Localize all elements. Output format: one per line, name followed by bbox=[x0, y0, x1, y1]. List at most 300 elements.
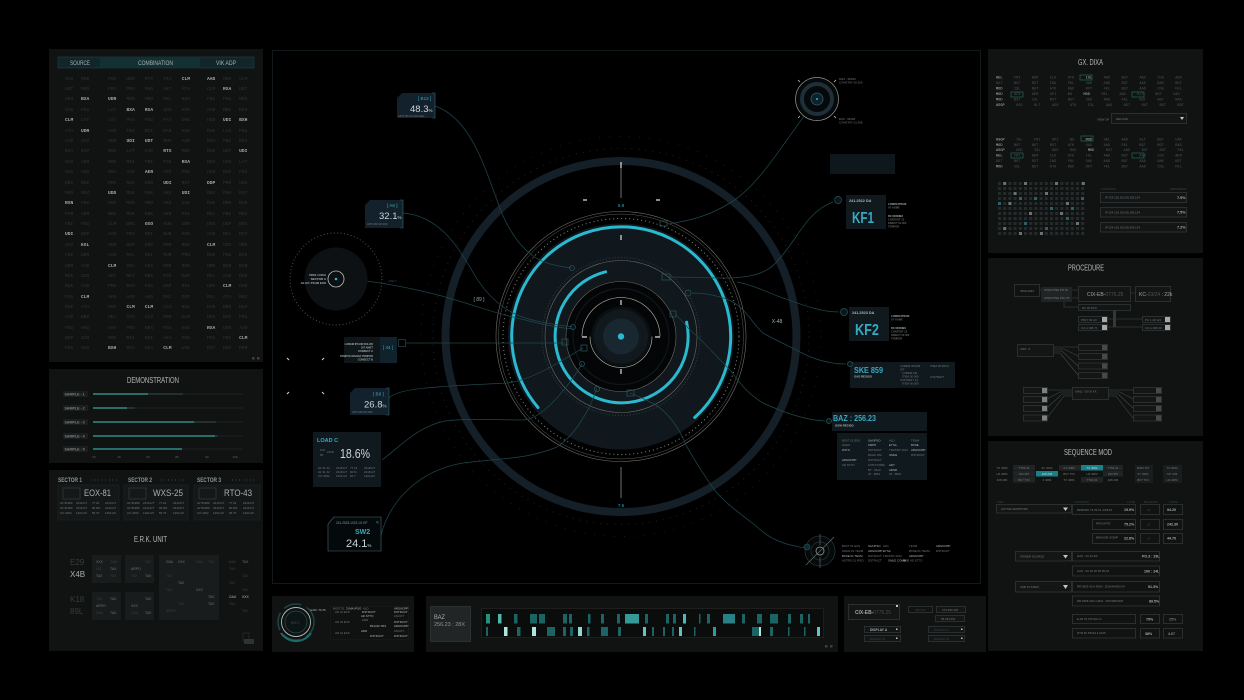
callout: KF2: 241.2523 DA bbox=[852, 311, 875, 315]
code chips: 3.X 4083 bbox=[1063, 466, 1075, 470]
baz data table: EYSA bbox=[889, 443, 897, 447]
sample bars: 40 bbox=[117, 455, 121, 459]
sequence column labels: LOAD bbox=[1127, 500, 1135, 504]
source column: FBI PSG bbox=[65, 221, 90, 227]
source column: RXN PSG bbox=[65, 200, 90, 206]
flow: top: 4650-3023 bbox=[1020, 289, 1034, 293]
combination column: PRO BXH PSG DGP RXI bbox=[108, 283, 190, 289]
lower code grid: ASGP ISL FRI UPI BG MOD HEL AAD KLT BGT UAD bbox=[996, 138, 1182, 142]
heading: procedure: PROCEDURE bbox=[1068, 264, 1104, 272]
sector 2: AV 51980 bbox=[127, 506, 140, 510]
code chips: BX7 TX4 bbox=[1063, 472, 1075, 476]
source column: PSG CLM bbox=[65, 294, 90, 300]
combination column: UKT RKT BBX PSG DGP bbox=[108, 273, 190, 279]
baz data table: BIO/T 51 EXS bbox=[842, 438, 860, 442]
source column: DRG RUK bbox=[65, 180, 90, 186]
target circle: bottom right: BXSE 01 TEAM bbox=[842, 554, 863, 558]
callout: SKE 859: ITEM 00 000 bbox=[902, 382, 919, 386]
unit value blocks: GAU bbox=[131, 611, 139, 615]
radar labels: 7.6 bbox=[618, 503, 625, 508]
unit value blocks: TAX bbox=[96, 597, 103, 601]
sector 3: 56 70 bbox=[229, 511, 237, 515]
unit value blocks: TAX bbox=[242, 560, 249, 564]
callout: SKE 859: LOREM IPSUM bbox=[900, 364, 921, 368]
callout: KF2: TEMPOR bbox=[891, 336, 902, 340]
combination column: PSG UDR RTX ATA CLM bbox=[108, 76, 190, 82]
callout: 44: SIT AMET bbox=[361, 346, 373, 350]
callout: KF1: CONTENT 12 bbox=[888, 218, 905, 222]
code chips: 408 296 bbox=[997, 478, 1008, 482]
code chips: H4 4083 bbox=[1167, 478, 1178, 482]
target circle: bottom right: ILM.IPSO bbox=[868, 544, 881, 548]
sector 3: 2419 HT bbox=[213, 506, 224, 510]
vik adp column: RUK PSG BXH bbox=[207, 252, 248, 258]
sample bars: 60 bbox=[146, 455, 150, 459]
radar table: ADR bbox=[361, 629, 367, 633]
combination column: LAT BXA RXA UDO HAD bbox=[108, 107, 190, 113]
sector 2: WXS-25 bbox=[153, 488, 183, 498]
flow: top: PR17 00 AX bbox=[1081, 318, 1097, 322]
cix-eb readout bbox=[848, 604, 900, 620]
baz data table bbox=[837, 433, 927, 480]
sequence value rows: 22.8% bbox=[1124, 536, 1135, 540]
baz data table: ARGNOPP bbox=[911, 448, 926, 452]
radar table: ASCOT bbox=[394, 629, 404, 633]
sector 2: 2419 HT bbox=[143, 506, 154, 510]
radar table: GAM: 70.25 bbox=[310, 608, 326, 612]
radar table: BIO/T 51 bbox=[333, 606, 345, 610]
sample bars: 20 bbox=[92, 455, 96, 459]
target circle: bottom right: TEAM bbox=[909, 544, 918, 548]
panel: load c: CO 4452 bbox=[318, 474, 330, 478]
combination column: AAD FBI BCI DAN HAD bbox=[108, 128, 190, 134]
sequence value rows: PO.3 : 29L bbox=[1142, 554, 1160, 558]
code chips: TX 4084 bbox=[997, 466, 1008, 470]
callout: SKE 859: CONTENT 12 bbox=[900, 378, 918, 382]
sequence value rows: 94.20 bbox=[1167, 508, 1176, 512]
unit value blocks: XXX bbox=[178, 560, 186, 564]
callout: KF1 bbox=[834, 195, 907, 229]
dropdown: view: VIEW OF bbox=[1097, 118, 1109, 122]
target circle: top right: CONSTAT: 00.300 bbox=[839, 80, 863, 84]
source column: HAG HUD bbox=[65, 169, 90, 175]
callout: KF2: LOREM IPSUM bbox=[891, 314, 909, 318]
combination column: HUD DGP DGP PRO RUK bbox=[108, 242, 190, 248]
sector 3: 1204 AX bbox=[213, 511, 224, 515]
unit value blocks: TAX bbox=[110, 597, 117, 601]
combination column: AAD RXL RXL RUK PRO bbox=[108, 252, 190, 258]
target circle: left: ARD-F bbox=[388, 279, 397, 283]
source column: RUK ZZO bbox=[65, 273, 90, 279]
code chips: 3 4084 bbox=[1043, 478, 1052, 482]
sequence value rows: 75.2% bbox=[1124, 522, 1135, 526]
sector 2: 2419 HT bbox=[143, 501, 154, 505]
unit value blocks: TAX bbox=[131, 574, 138, 578]
vik adp column: PSG FBI CLM bbox=[207, 335, 248, 341]
source column: RUK AAD bbox=[65, 283, 90, 289]
source column: PSG HAG bbox=[65, 325, 90, 331]
sector 2: SECTOR 2 bbox=[128, 478, 153, 484]
callout: B12: 48.3% bbox=[410, 104, 433, 115]
heading: gx. dixa: GX. DIXA bbox=[1078, 58, 1103, 67]
baz data table: OMLE bbox=[889, 453, 897, 457]
sequence column labels bbox=[997, 500, 1178, 504]
sequence value rows bbox=[1072, 504, 1182, 638]
unit value blocks: TAX bbox=[208, 602, 215, 606]
flow: top: CO-1 006 00 bbox=[1145, 326, 1162, 330]
combination column: BXH BXA DGA CLM UAE bbox=[108, 345, 190, 351]
sequence value rows: RR.9459 90A.3-6DA : 2DX/90PADR bbox=[1077, 599, 1123, 603]
sector 1: 2419 HT bbox=[105, 506, 116, 510]
vik adp column: RUK UDT UDI bbox=[207, 148, 248, 154]
callout: KF2: CONTENT 12 bbox=[891, 330, 908, 334]
panel: load c: 77 21 bbox=[350, 466, 358, 470]
sector 2: 90 MA bbox=[159, 506, 167, 510]
vik adp column: RIT DHK PDR bbox=[207, 345, 248, 351]
combination column: AER AAD AAD RXL DGP bbox=[108, 294, 190, 300]
sample bars: SAMPLE - 5 bbox=[64, 448, 85, 452]
dot matrix bbox=[998, 182, 1086, 237]
location progress list: IP 224.125.162.65.053.134 bbox=[1105, 226, 1140, 230]
code chips: TT92 31 bbox=[1108, 466, 1119, 470]
sector 1: 2419 HT bbox=[105, 501, 116, 505]
code chips: B042 TM bbox=[1137, 466, 1149, 470]
source column: UKT MOD bbox=[65, 86, 90, 92]
sector 2 bbox=[124, 478, 188, 520]
code chips: BX7 TX4 bbox=[1137, 478, 1149, 482]
callout: 44 bbox=[340, 337, 406, 363]
sector 3: 1204 AX bbox=[243, 511, 254, 515]
target circle: top right: CONSTAT: 01.308 bbox=[839, 120, 863, 124]
callout: KF2: DX 00000BX bbox=[891, 326, 906, 330]
address chips bbox=[908, 606, 966, 622]
unit value blocks: TAX bbox=[229, 567, 236, 571]
target circle: bottom right: OMLD 01 TEAM bbox=[842, 549, 864, 553]
source column: HAD AER bbox=[65, 159, 90, 165]
vik adp column: RXA FBI BXI bbox=[207, 138, 248, 144]
code chips: 408 296 bbox=[1108, 478, 1119, 482]
sector 2: 1204 AX bbox=[143, 511, 154, 515]
unit value blocks: ARPO bbox=[166, 609, 176, 613]
code chips: TX 4084 bbox=[1087, 466, 1098, 470]
source column: UAX PSG bbox=[65, 107, 90, 113]
dropdowns: ACTIVE MONITORS bbox=[1001, 507, 1028, 511]
unit value blocks: TAX bbox=[229, 602, 236, 606]
sequence value rows: 25% bbox=[1169, 618, 1177, 622]
combination column: RUK LAT SJK RTX MOD bbox=[108, 148, 190, 154]
sector 1: AV 51980 bbox=[60, 501, 73, 505]
sector 1: 56 70 bbox=[92, 511, 100, 515]
placeholder block bbox=[830, 154, 895, 174]
source column: PSG HAD bbox=[65, 345, 90, 351]
vik adp column bbox=[207, 76, 248, 351]
combination column: MOD RXI FBI PSG RXA bbox=[108, 159, 190, 165]
vik adp column: RXL FBI MOZ bbox=[207, 211, 248, 217]
vik adp column: HUD UDI BXH bbox=[207, 117, 248, 123]
vik adp column: DGO BXI PSG bbox=[207, 314, 248, 320]
upper code grid: ASGP DGO KLT ADX ATK ISL AAD BGT BGT BGT BGT bbox=[996, 104, 1185, 108]
location progress list: LOCATION bbox=[1101, 187, 1116, 191]
callout: KF1: AT HOME bbox=[888, 206, 900, 210]
sequence value rows: 89.5% bbox=[1149, 600, 1160, 604]
flow: top: KC-23/24 : 22k bbox=[1139, 292, 1173, 298]
callout: BAZ: BAZ : 256.23 bbox=[833, 414, 876, 423]
baz data table: ADY bbox=[889, 463, 895, 467]
target circle: left: DISX 1415A bbox=[309, 273, 327, 277]
sector 1: SECTOR 1 bbox=[58, 478, 83, 484]
baz data table: DSTRUCT bbox=[868, 458, 882, 462]
radar table: AD 01 EXS bbox=[335, 631, 350, 635]
table header tabs: SOURCE bbox=[70, 61, 90, 67]
sector 1 bbox=[58, 478, 119, 520]
upper code grid: MOD AC3 AER UPI BG MOD HEL AAD KLT BGT UAD bbox=[996, 93, 1180, 97]
source column: PAR AER bbox=[65, 211, 90, 217]
combination column: CLM CDA COX ORD RUK bbox=[108, 263, 190, 269]
source column: DGP ZZO bbox=[65, 335, 90, 341]
sector 3: AV 51980 bbox=[197, 501, 210, 505]
target circle: top right: ESX : 68190 bbox=[839, 117, 856, 121]
unit value blocks: ARPO bbox=[96, 604, 106, 608]
dropdowns bbox=[996, 504, 1072, 592]
sector 3: 2419 HT bbox=[243, 501, 254, 505]
sequence value rows: 15 bbox=[1147, 508, 1151, 512]
vik adp column: CLM RXA UKT bbox=[207, 86, 248, 92]
sector 3: RTO-43 bbox=[224, 488, 252, 498]
sample bars: SAMPLE - 3 bbox=[64, 420, 85, 424]
dropdowns: POWER SOURCE bbox=[1020, 554, 1044, 558]
panel: load c: 2418 HT bbox=[364, 466, 375, 470]
sequence value rows: 38% bbox=[1145, 632, 1153, 636]
target circle: left: GLUV: P1100 EXS bbox=[301, 281, 326, 285]
sequence column labels: TOTAL bbox=[1169, 500, 1178, 504]
display buttons: DISPLAY B bbox=[934, 637, 949, 641]
vik adp column: RUK DRO RUK bbox=[207, 200, 248, 206]
sector 1: 2419 HT bbox=[76, 501, 87, 505]
panel: load c: 2418 bbox=[327, 450, 334, 454]
callout: 44: CONSECT A bbox=[358, 349, 373, 353]
sector 3: 2419 HT bbox=[243, 506, 254, 510]
callout: SKE 859: CONTENT bbox=[930, 375, 944, 379]
panel: sequence mod bbox=[988, 441, 1203, 651]
radar table: AD 01 EXS bbox=[335, 610, 350, 614]
vik adp column: RXL AAD RUK bbox=[207, 273, 248, 279]
target circle: top right bbox=[796, 77, 863, 124]
unit value blocks: TAX bbox=[178, 602, 185, 606]
callout: SKE 859: ITEM 00 000 A bbox=[930, 364, 949, 368]
baz data table: DSTO bbox=[842, 448, 851, 452]
sequence value rows: 79% bbox=[1146, 618, 1154, 622]
radar table bbox=[310, 606, 409, 640]
target circle: bottom right: BXSE 01 TEAM bbox=[909, 549, 930, 553]
code chips: H4 4083 bbox=[1087, 472, 1098, 476]
sector 3: CO 4452 bbox=[197, 511, 209, 515]
vik adp column: DAN BBX DGP bbox=[207, 304, 248, 310]
unit value blocks: TAX bbox=[242, 574, 249, 578]
panel: load c: 2418 HT bbox=[336, 470, 347, 474]
combination column: RXA AAD AER FBI PSG bbox=[108, 169, 190, 175]
flow: top: CO-1 006 71 bbox=[1081, 326, 1098, 330]
callout: B8: [ B8 ] bbox=[373, 392, 384, 396]
unit value blocks: XXX bbox=[96, 560, 104, 564]
sample bars: 90 bbox=[205, 455, 209, 459]
address chips: 463.351 bbox=[915, 608, 926, 612]
source column: RUK ATA bbox=[65, 304, 90, 310]
combination column: UDR MOD MOD RXL BXH bbox=[108, 96, 190, 102]
flow: top bbox=[1014, 284, 1173, 330]
sequence value rows: 91.3% bbox=[1148, 585, 1159, 589]
unit value blocks: TAX bbox=[166, 588, 173, 592]
unit value blocks: VIA bbox=[96, 567, 102, 571]
radar table: BKLMA TRS bbox=[370, 624, 386, 628]
address chips: 55.253.451 bbox=[941, 617, 956, 621]
sector 1: CO 4452 bbox=[60, 511, 72, 515]
target circle: bottom right: DSTRUCT bbox=[868, 554, 882, 558]
radar table: DSTRUCT bbox=[362, 610, 376, 614]
sector 2: 2419 HT bbox=[173, 501, 184, 505]
panel: load c: 1204 AX bbox=[336, 474, 347, 478]
sector 3: AV 51980 bbox=[197, 506, 210, 510]
dropdown: view bbox=[1097, 114, 1186, 124]
panel: load c: 1204 AX bbox=[364, 474, 375, 478]
sector 2: 56 70 bbox=[159, 511, 167, 515]
target circle: top right: MSX : 68190 bbox=[839, 77, 856, 81]
unit value blocks bbox=[92, 555, 250, 620]
upper grid highlights bbox=[1011, 75, 1144, 97]
baz readout: BAZ bbox=[434, 614, 445, 621]
callout: SKE 859: SIT bbox=[900, 368, 905, 372]
sequence value rows: RPO/AFTE bbox=[1096, 522, 1111, 526]
icon: mini radar bbox=[278, 604, 314, 641]
callout: KF1: TEMPOR bbox=[888, 224, 899, 228]
location progress list: IP 224.125.162.65.195.134 bbox=[1105, 210, 1140, 214]
unit value blocks: ARPO bbox=[131, 567, 141, 571]
upper code grid: MOD BGT ISL RXT BGT UAD AAD FKL BGT BGT RAD bbox=[996, 98, 1182, 102]
combination column: CLM DRG OXO HUD UDR bbox=[108, 221, 190, 227]
baz data table: BXSE bbox=[911, 443, 919, 447]
baz data table: AT : 8051 bbox=[868, 472, 881, 476]
target circle: bottom right bbox=[804, 534, 951, 568]
source column: AAD UAX bbox=[65, 138, 90, 144]
callout: A6: 32.1% bbox=[379, 211, 402, 222]
target circle: bottom right: OMLE COMB bbox=[888, 558, 906, 562]
callout: BAZ: GOW REGISO bbox=[835, 424, 854, 428]
sequence column labels: BALANCE bbox=[1144, 500, 1158, 504]
baz data table: RT : 9123 bbox=[868, 468, 881, 472]
sample bars: 80 bbox=[175, 455, 179, 459]
source column: BXA RIP bbox=[65, 148, 90, 154]
flow: bottom: UNIQ : 00 00 XX bbox=[1075, 390, 1097, 394]
unit value blocks: TAX bbox=[208, 595, 215, 599]
code chips: TT93 31 bbox=[1019, 466, 1030, 470]
unit value blocks: XXX bbox=[196, 588, 204, 592]
baz data table: BAGK.OM bbox=[868, 453, 882, 457]
callout: KF2: KF2 bbox=[855, 322, 879, 339]
radar table: ARGNOPP bbox=[394, 624, 409, 628]
radar labels: 5.8 bbox=[618, 203, 625, 208]
target circle: bottom right: ASTRO 01 IPSO bbox=[842, 558, 864, 562]
upper code grid: HEL FRI AER CLD ATK ISL AAD BGT ASX CDG AER bbox=[996, 76, 1183, 80]
display buttons bbox=[864, 626, 964, 642]
sector 2: 1204 AX bbox=[173, 511, 184, 515]
upper code grid: MOD ISL BGT ATK RGO RXT FKL BGT AAD CDG FKL bbox=[996, 88, 1182, 92]
flow: unit bbox=[1018, 344, 1108, 378]
sector 2: 77 24 bbox=[159, 501, 167, 505]
sector 2: AV 51980 bbox=[127, 501, 140, 505]
sequence value rows: DTR 50 PR.8A 4.2015 bbox=[1077, 631, 1106, 635]
callout: KF2: DIRECT 00 000 bbox=[891, 333, 910, 337]
callout: B8: APS RD 00 000 bbox=[352, 410, 373, 414]
radar table: DSTRUCT bbox=[370, 634, 384, 638]
code chips: 293 357 bbox=[1108, 472, 1119, 476]
baz data table: ASHX bbox=[842, 443, 850, 447]
radar table: ARGNOPP bbox=[394, 606, 409, 610]
vik adp column: UDO CLM DHK bbox=[207, 283, 248, 289]
vik adp column: AAD MOD CLM bbox=[207, 76, 248, 82]
unit value blocks: TAX bbox=[178, 581, 185, 585]
location progress list: 7.2% bbox=[1177, 226, 1186, 230]
sample bars: SAMPLE - 1 bbox=[64, 392, 85, 396]
connector nodes bbox=[562, 221, 691, 396]
source column bbox=[65, 76, 90, 351]
flow: top: DX 20 DXX bbox=[1082, 306, 1097, 310]
baz data table: KMPP bbox=[868, 443, 876, 447]
unit value blocks: TAX bbox=[166, 574, 173, 578]
panel: gx. dixa bbox=[988, 49, 1203, 253]
radar table: ASCOT bbox=[394, 614, 404, 618]
callout: KF2 bbox=[840, 307, 910, 341]
code chips: H4 4083 bbox=[997, 472, 1008, 476]
panel: data table bbox=[49, 49, 263, 362]
unit value blocks: TAX bbox=[242, 609, 249, 613]
radar table: ADR bbox=[362, 618, 368, 622]
panel: load c: 90 M bbox=[350, 470, 357, 474]
target circle: bottom right: ALD bbox=[883, 544, 889, 548]
combination column: AAD FBI DGT RUK HAD bbox=[108, 231, 190, 237]
location progress list: 7.5% bbox=[1177, 196, 1186, 200]
sector 1: EOX-81 bbox=[84, 488, 111, 498]
callout: KF1: 241.2522 DA bbox=[849, 199, 872, 203]
location progress list: IP 224.125.162.69.153.134 bbox=[1105, 196, 1140, 200]
combination column: DGP MOD MOD FBI UAE bbox=[108, 200, 190, 206]
callout: B8 bbox=[350, 388, 389, 415]
panel: sectors and E.R.K. unit bbox=[49, 470, 263, 651]
target circle: bottom right: ARGNOPP bbox=[868, 549, 883, 553]
baz data table: AD.STTO bbox=[842, 463, 855, 467]
radar labels: [ 89 ] bbox=[473, 297, 485, 303]
panel: central radar bbox=[272, 50, 980, 584]
vik adp column: CLM CDG ORD bbox=[207, 242, 248, 248]
vik adp column: BBX PSK RUT bbox=[207, 190, 248, 196]
radar ticks bbox=[582, 162, 660, 498]
target circle: bottom right: DSTRUCT bbox=[868, 558, 882, 562]
sample bars bbox=[63, 391, 243, 459]
callout: KF1: KF1 bbox=[852, 210, 874, 227]
radar rings bbox=[421, 136, 821, 536]
sector 1: 1204 AX bbox=[105, 511, 116, 515]
baz data table: TRASTR 1012 bbox=[889, 448, 908, 452]
heading: demonstration: DEMONSTRATION bbox=[127, 376, 179, 385]
lower code grid: HEL FRI AER CLD ATK ISL AAD BGT ASX CDG AER bbox=[996, 154, 1183, 158]
callout: SKE 859 bbox=[848, 362, 955, 388]
vik adp column: DDP PRO UKE bbox=[207, 180, 248, 186]
baz data table: AT : 8051 bbox=[889, 472, 902, 476]
combination column: UAX PRO BBX PSG HAD bbox=[108, 325, 190, 331]
radar table: DSTRUCT bbox=[394, 620, 408, 624]
unit value blocks: TAX bbox=[145, 611, 152, 615]
sequence value rows: 44.70 bbox=[1167, 536, 1176, 540]
flow: bottom bbox=[1024, 388, 1162, 421]
unit codes bbox=[70, 558, 85, 616]
